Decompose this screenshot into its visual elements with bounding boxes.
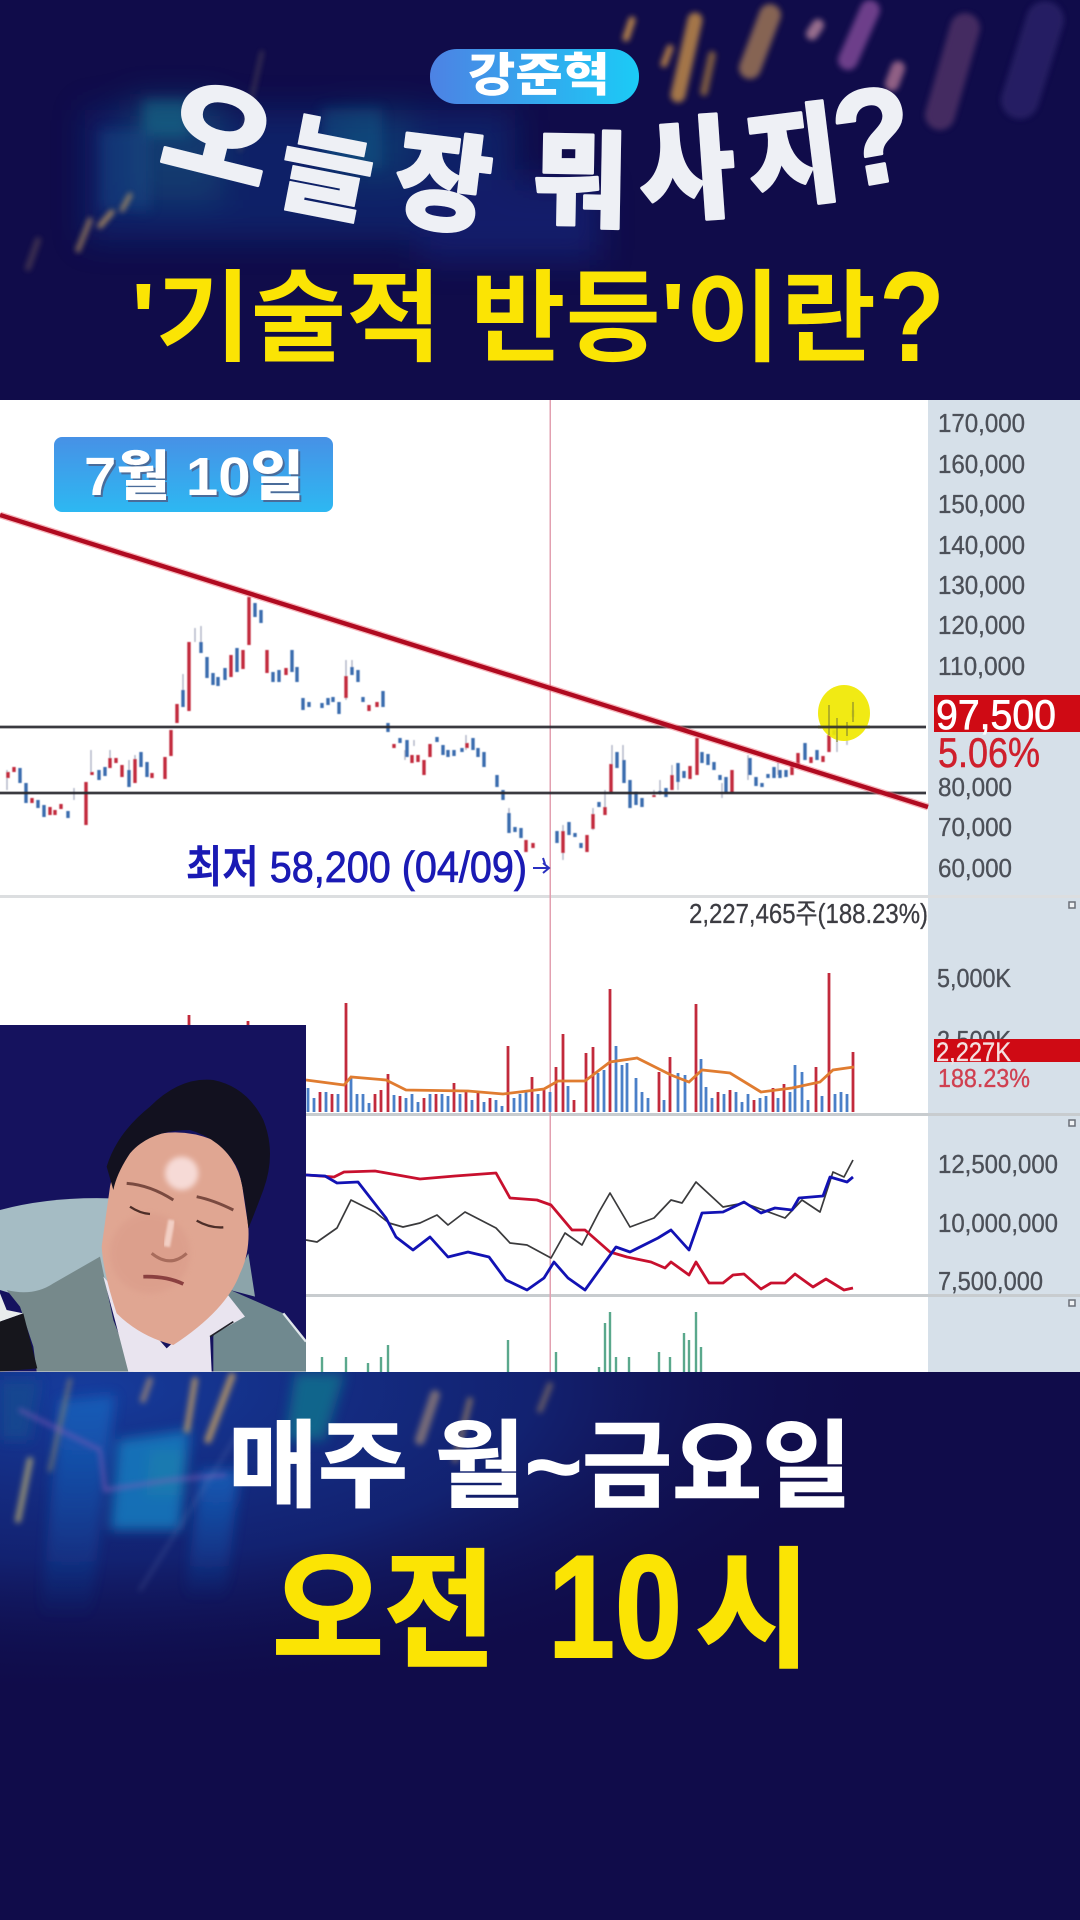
- investor axis labels: [938, 1149, 1058, 1296]
- price axis labels: [938, 408, 1025, 883]
- main title: curved white headline: 늘: [269, 105, 384, 239]
- shirt: [103, 1277, 245, 1372]
- volume axis labels: [934, 963, 1080, 1093]
- volume axis labels: 5,000K: [937, 963, 1012, 993]
- main title: curved white headline: 사: [635, 106, 739, 237]
- price candles: [7, 597, 853, 860]
- bottom schedule: time: 시: [695, 1538, 811, 1684]
- yellow subtitle: ?: [879, 246, 945, 389]
- volume axis labels: 188.23%: [938, 1063, 1030, 1093]
- investor axis labels: 12,500,000: [938, 1149, 1058, 1179]
- main title: curved white headline: [152, 55, 925, 250]
- microphone: [0, 1293, 37, 1372]
- suit jacket: [7, 1257, 306, 1372]
- red down trendline: [0, 515, 928, 807]
- price axis labels: 140,000: [938, 530, 1025, 560]
- badge: date: 7월 10일: [84, 447, 304, 507]
- current price tag: 97,500: [936, 691, 1056, 738]
- chair: [0, 1198, 255, 1303]
- volume value label: 2,227,465주(188.23%): [689, 898, 928, 929]
- bottom schedule: time: [272, 1525, 811, 1688]
- price axis labels: 80,000: [938, 772, 1012, 802]
- bottom schedule: time: 10: [548, 1525, 682, 1688]
- webcam background: [0, 1025, 306, 1372]
- main title: curved white headline: 장: [388, 121, 497, 250]
- bottom background: blurred stock chart texture: [0, 1372, 735, 1638]
- main title: curved white headline: ?: [822, 55, 925, 217]
- top name pill: 강준혁: [468, 49, 610, 101]
- main title: curved white headline: 뭐: [532, 123, 628, 241]
- yellow subtitle: '기술적 반등'이란: [131, 263, 876, 375]
- badge: date: [54, 437, 333, 512]
- price axis labels: 70,000: [938, 812, 1012, 842]
- lower green indicator bars: [322, 1312, 701, 1372]
- head: [102, 1080, 270, 1345]
- panel: stock chart: [0, 400, 1080, 1372]
- current price tag: [934, 691, 1080, 776]
- volume axis labels: 2,227K: [936, 1037, 1011, 1067]
- support and resistance lines: [0, 727, 926, 793]
- current price tag: 5.06%: [938, 729, 1040, 776]
- volume moving average line: [306, 1058, 854, 1094]
- price axis labels: 60,000: [938, 853, 1012, 883]
- yellow subtitle: [131, 246, 945, 389]
- main title: curved white headline: 오: [152, 65, 285, 211]
- presenter webcam portrait: [0, 1025, 306, 1372]
- low price annotation: 최저 58,200 (04/09): [186, 843, 527, 892]
- top background: blurred stock chart texture: [28, 10, 1045, 268]
- yellow highlight circle: [818, 685, 870, 742]
- price axis labels: 170,000: [938, 408, 1025, 438]
- investor axis labels: 10,000,000: [938, 1208, 1058, 1238]
- price axis labels: 150,000: [938, 489, 1025, 519]
- badge: date: 7월 10일: [86, 449, 306, 509]
- panel corner markers: [1069, 902, 1075, 1306]
- price axis labels: 130,000: [938, 570, 1025, 600]
- bottom schedule: time: 오전: [272, 1541, 496, 1684]
- chart backgrounds: [0, 400, 1080, 1372]
- price axis labels: 110,000: [938, 651, 1025, 681]
- volume bar chart: [189, 973, 853, 1112]
- price axis labels: 120,000: [938, 610, 1025, 640]
- main title: curved white headline: 지: [740, 94, 846, 225]
- investor axis labels: 7,500,000: [938, 1266, 1043, 1296]
- volume axis labels: 2,500K: [937, 1025, 1012, 1055]
- price axis labels: 160,000: [938, 449, 1025, 479]
- top name pill: [430, 49, 639, 104]
- investor flow lines: [306, 1160, 853, 1290]
- bottom schedule: weekdays: 매주 월~금요일: [228, 1414, 852, 1520]
